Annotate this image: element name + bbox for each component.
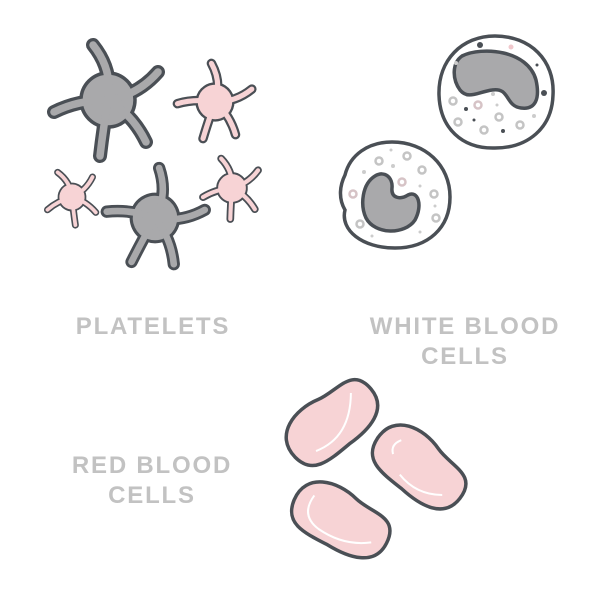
red cell 3	[283, 471, 400, 569]
label: platelets: PLATELETS	[76, 313, 230, 340]
red cell 2	[362, 413, 478, 521]
platelet: small pink	[39, 164, 103, 231]
platelet: large gray 2	[93, 156, 213, 279]
red cell 1	[274, 367, 389, 477]
platelet: pink 2	[200, 155, 262, 221]
platelet: large gray 1	[54, 45, 158, 156]
white cell 2	[340, 142, 450, 248]
white blood cells illustration	[340, 36, 553, 248]
label: red blood cells: CELLS	[108, 482, 196, 509]
platelets illustration	[39, 45, 262, 279]
platelet: pink 1	[172, 59, 255, 145]
label: white blood cells: CELLS	[421, 343, 509, 370]
label: white blood cells: WHITE BLOOD	[370, 313, 560, 340]
red blood cells illustration	[274, 367, 478, 569]
white cell 1	[439, 36, 553, 148]
label: red blood cells: RED BLOOD	[72, 452, 232, 479]
